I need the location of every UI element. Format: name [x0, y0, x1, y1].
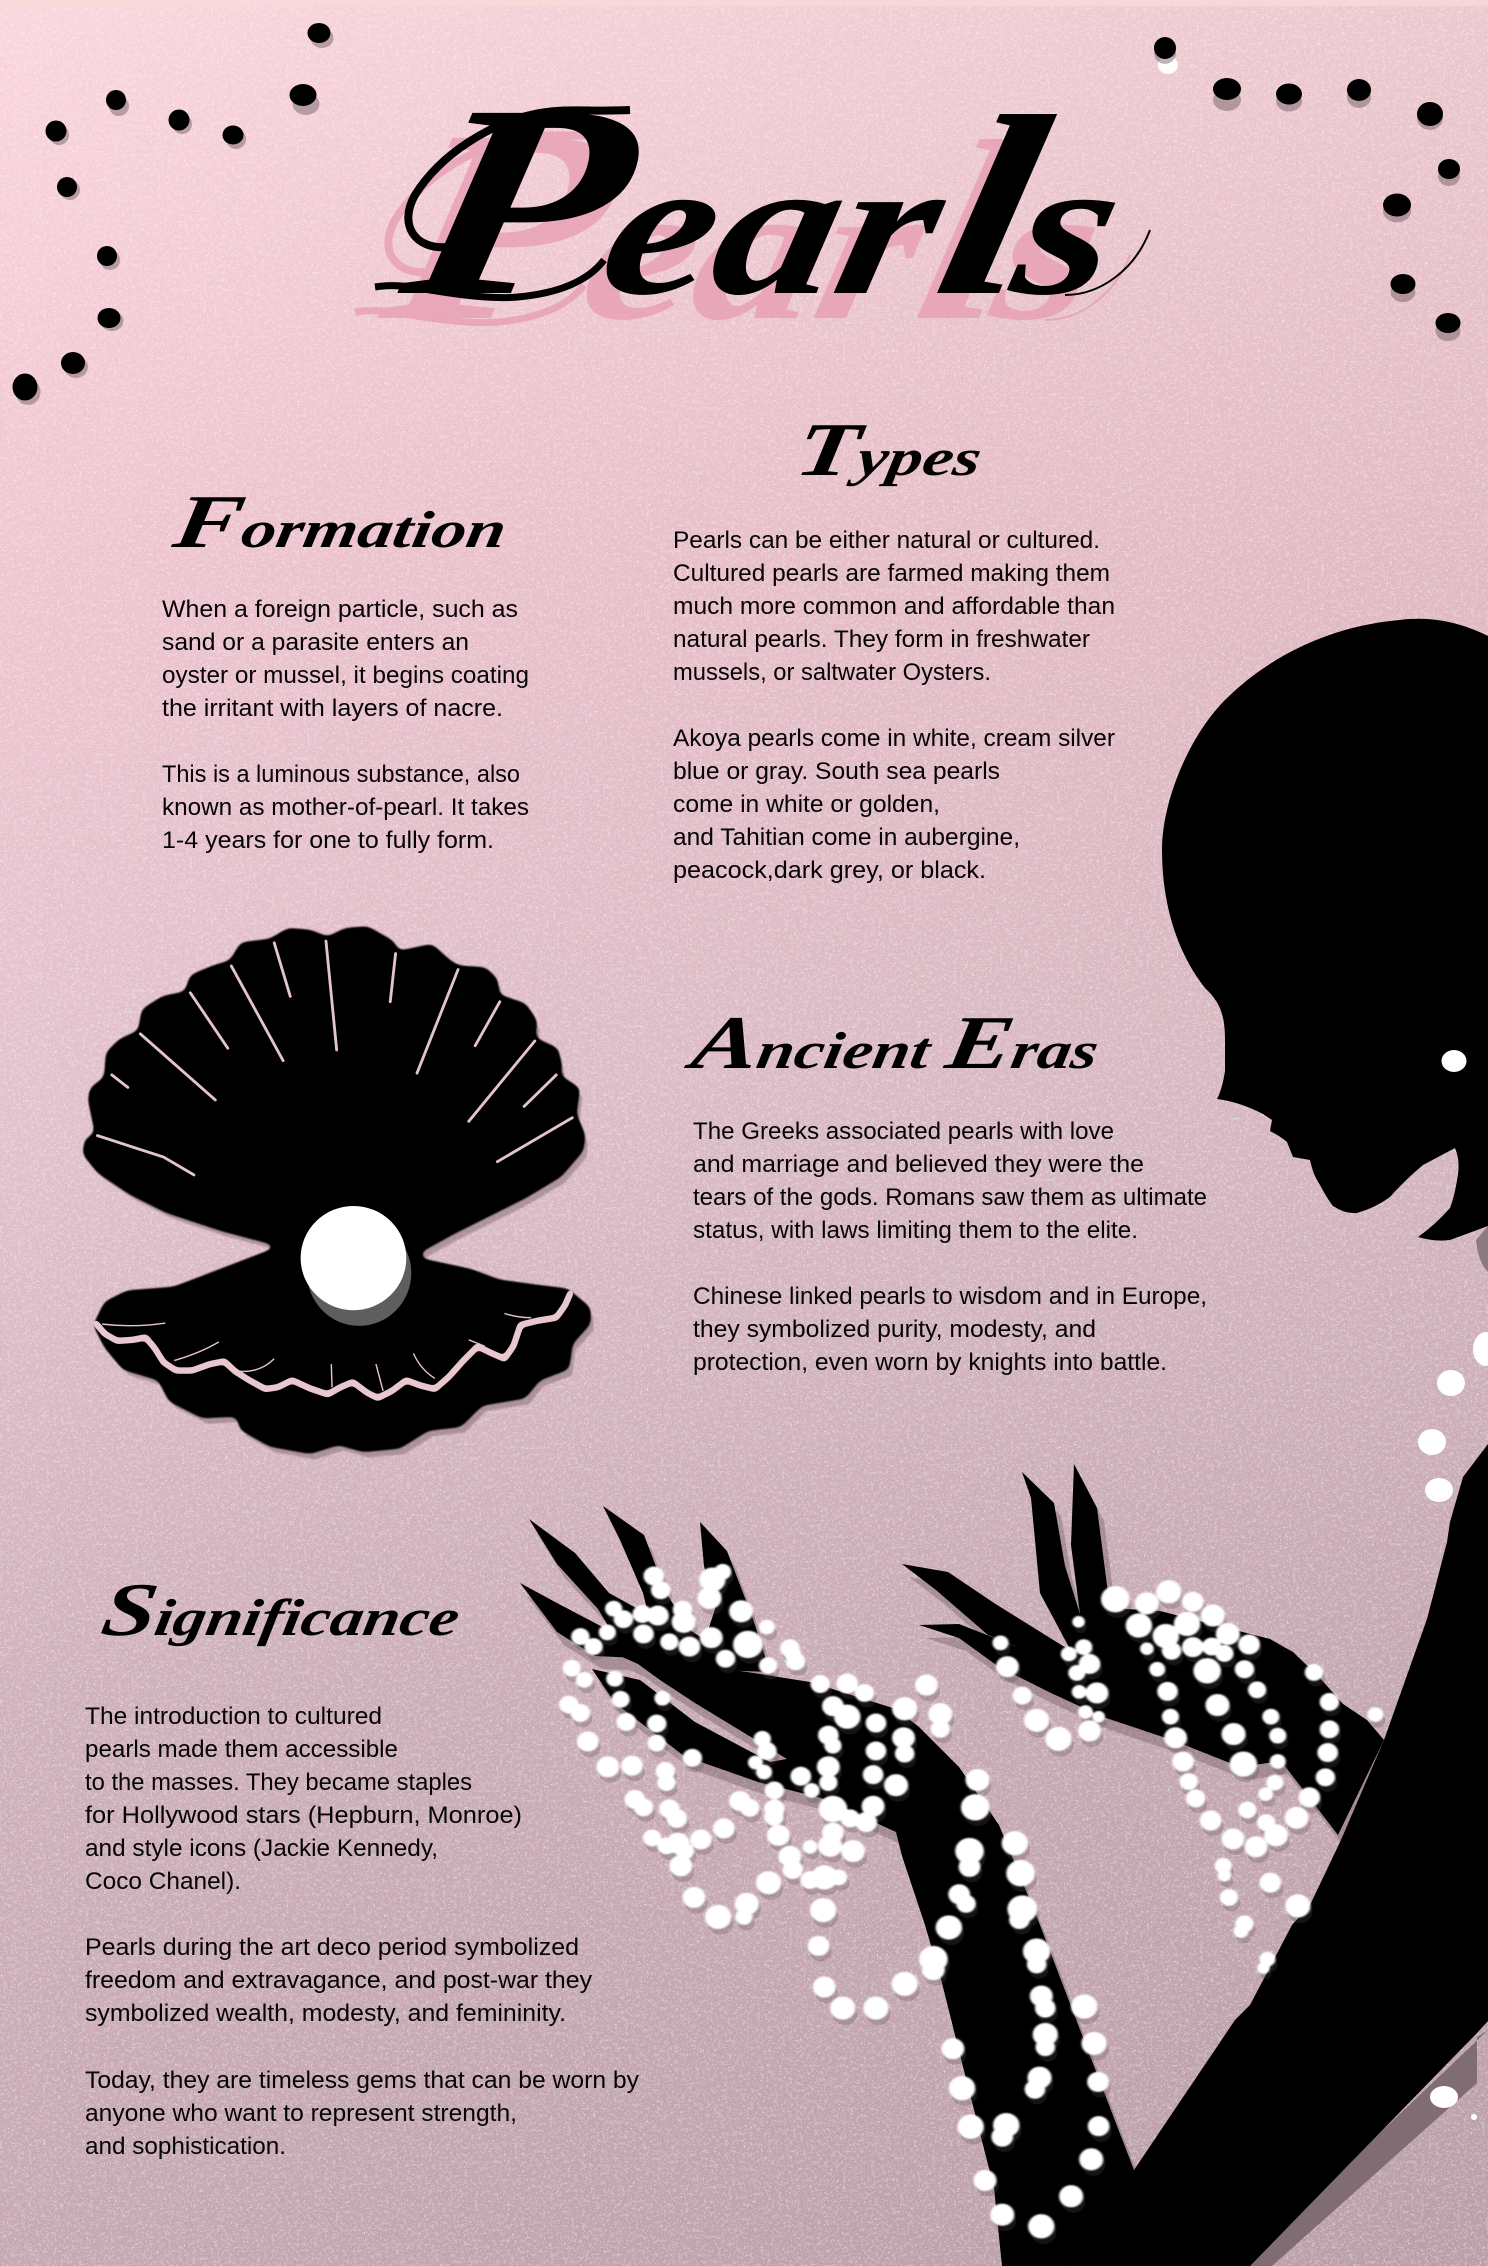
text block: Formation: oyster or mussel, it begins coating — [162, 662, 529, 689]
pearl strands — [561, 1565, 1382, 2237]
illustration: woman silhouette — [520, 619, 1488, 2266]
text block: Formation: known as mother-of-pearl. It takes — [162, 794, 529, 821]
text block: Significance: anyone who want to represent strength, — [85, 2100, 517, 2127]
pearl strands on hands and arm — [561, 1565, 1384, 2243]
text block: Ancient Eras: protection, even worn by knights into battle. — [693, 1349, 1167, 1376]
text block: Types: Akoya pearls come in white, cream silver — [673, 725, 1115, 752]
text block: Significance: and style icons (Jackie Kennedy, — [85, 1835, 438, 1862]
title shadow: l — [898, 88, 1050, 374]
text block: Formation: When a foreign particle, such as — [162, 596, 518, 623]
text block: Formation: 1-4 years for one to fully form. — [162, 827, 494, 854]
necklace pearls — [1418, 1332, 1488, 2120]
text block: Ancient Eras — [693, 1118, 1207, 1376]
text block: Ancient Eras: status, with laws limiting them to the elite. — [693, 1217, 1138, 1244]
pearl — [301, 1206, 406, 1310]
title shadow — [355, 73, 1136, 378]
text block: Formation: the irritant with layers of nacre. — [162, 695, 503, 722]
heading: Formation: Formation — [167, 480, 515, 564]
title shadow: P — [359, 73, 644, 378]
shell thin lines — [102, 1313, 531, 1391]
heading: Ancient Eras: Ancient Eras — [681, 1001, 1107, 1085]
head — [1162, 619, 1488, 1241]
title main: l — [918, 63, 1070, 349]
title main — [375, 48, 1156, 353]
text block: Ancient Eras: The Greeks associated pearls with love — [693, 1118, 1114, 1145]
earring pearl — [1442, 1050, 1466, 1072]
text block: Significance: The introduction to cultured — [85, 1703, 382, 1730]
text block: Significance — [85, 1703, 639, 2160]
text block: Significance: Coco Chanel). — [85, 1868, 241, 1895]
heading: Significance: Significance — [96, 1568, 468, 1652]
text block: Types: peacock,dark grey, or black. — [673, 857, 986, 884]
text block: Types: blue or gray. South sea pearls — [673, 758, 1000, 785]
decorative black pearls: top left — [12, 23, 334, 405]
shell shadow — [90, 936, 593, 1459]
text block: Significance: for Hollywood stars (Hepburn, Monroe) — [85, 1802, 522, 1829]
text block: Types: mussels, or saltwater Oysters. — [673, 659, 991, 686]
shell body — [85, 929, 588, 1452]
title main: P — [379, 48, 664, 353]
decorative black pearls: top right — [1154, 37, 1460, 341]
text block: Significance: to the masses. They became staples — [85, 1769, 472, 1796]
pearl shadow — [307, 1220, 411, 1326]
text block: Ancient Eras: tears of the gods. Romans saw them as ultimate — [693, 1184, 1207, 1211]
title shadow: s — [976, 142, 1121, 361]
text block: Ancient Eras: they symbolized purity, modesty, and — [693, 1316, 1096, 1343]
text block: Significance: Today, they are timeless gems that can be worn by — [85, 2067, 639, 2094]
pearl strand shadows — [563, 1571, 1384, 2243]
text block: Types: and Tahitian come in aubergine, — [673, 824, 1020, 851]
body drop shadow — [1240, 2030, 1488, 2266]
text block: Types: natural pearls. They form in freshwater — [673, 626, 1090, 653]
text block: Significance: Pearls during the art deco period symbolized — [85, 1934, 579, 1961]
text block: Significance: and sophistication. — [85, 2133, 286, 2160]
title shadow: ear — [566, 142, 945, 361]
shell wavy lip — [96, 1293, 571, 1398]
text block: Significance: freedom and extravagance, and post-war they — [85, 1967, 592, 1994]
shell ridges — [97, 941, 572, 1175]
hands shadow — [527, 1477, 1391, 2266]
text block: Types — [673, 527, 1115, 884]
heading: Types: Types — [790, 408, 990, 492]
text block: Types: come in white or golden, — [673, 791, 940, 818]
neck shadow — [1476, 1226, 1488, 1272]
text block: Significance: pearls made them accessible — [85, 1736, 398, 1763]
text block: Ancient Eras: and marriage and believed they were the — [693, 1151, 1144, 1178]
text block: Formation: This is a luminous substance, also — [162, 761, 520, 788]
text block: Significance: symbolized wealth, modesty, and femininity. — [85, 2000, 566, 2027]
text block: Formation — [162, 596, 529, 854]
title: Pearls — [355, 48, 1156, 378]
hands and arms — [520, 1464, 1384, 2266]
body and shoulder — [1068, 1444, 1488, 2266]
text block: Types: much more common and affordable than — [673, 593, 1115, 620]
text block: Ancient Eras: Chinese linked pearls to wisdom and in Europe, — [693, 1283, 1207, 1310]
text block: Types: Cultured pearls are farmed making them — [673, 560, 1110, 587]
illustration: oyster shell with pearl — [85, 929, 593, 1459]
text block: Types: Pearls can be either natural or cultured. — [673, 527, 1100, 554]
title main: ear — [586, 117, 965, 336]
text block: Formation: sand or a parasite enters an — [162, 629, 469, 656]
title main: s — [996, 117, 1141, 336]
